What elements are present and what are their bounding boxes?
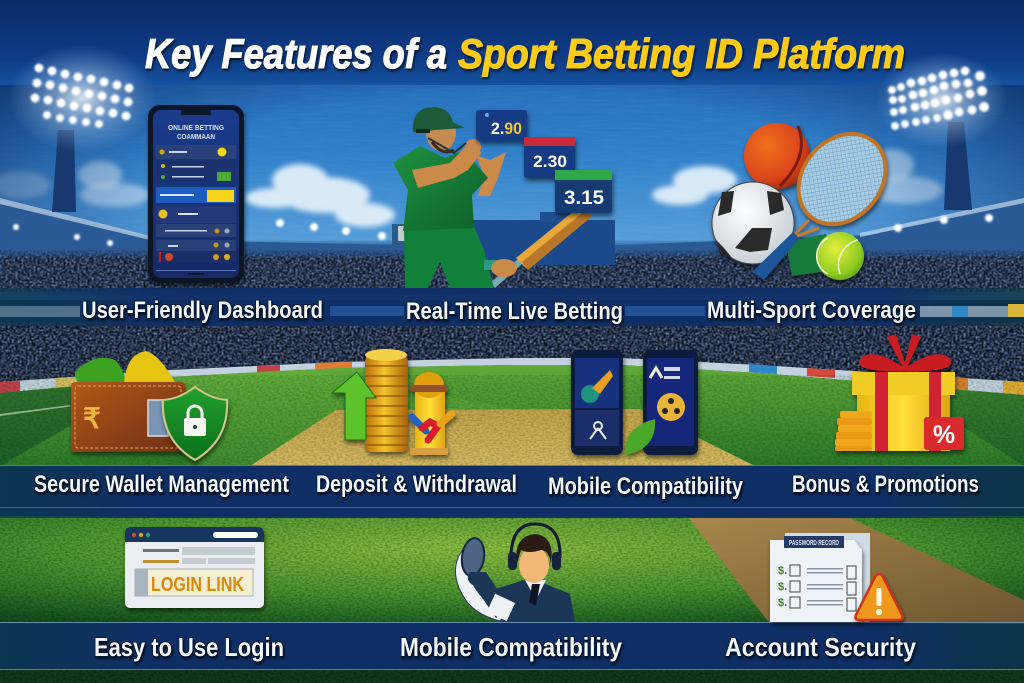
label: Real-Time Live Betting: Real-Time Live Betting (406, 298, 623, 325)
odds card 2.90: 2.90 (491, 119, 522, 138)
coin stack (835, 411, 872, 451)
warning triangle (856, 574, 902, 620)
ribbons (875, 372, 941, 451)
header band (0, 0, 1024, 85)
icon: two mobile phones (571, 350, 698, 455)
label: User-Friendly Dashboard: User-Friendly Dashboard (82, 297, 323, 324)
rupee sign: ₹ (83, 403, 101, 434)
label band row 2 (0, 465, 1024, 518)
phone left (571, 350, 623, 455)
yellow pouch (124, 351, 176, 384)
icon: gift box with coins and percent (835, 336, 964, 451)
suit (490, 578, 575, 622)
label: Mobile Compatibility (row 2): Mobile Compatibility (548, 473, 744, 500)
icon: coins with arrow and wicket (332, 349, 452, 455)
bow (860, 336, 950, 370)
phone right (643, 350, 698, 455)
lower stands with crowd and advertising boards (0, 322, 1024, 397)
background: stadium sky (0, 0, 1024, 300)
cricket ball (744, 123, 810, 189)
golden wicket (410, 372, 448, 455)
label band row 1 (0, 288, 1024, 326)
odds card 2.90 (476, 110, 527, 141)
box (857, 395, 950, 451)
document heading: PASSWORD RECORD (789, 540, 839, 547)
headset (511, 524, 560, 558)
green arrow (332, 372, 376, 440)
icon: support agent (455, 524, 575, 622)
face (426, 115, 456, 152)
shield (163, 387, 227, 460)
ear cups (508, 552, 561, 570)
shirt and tie (525, 580, 546, 606)
icon: cricketer (392, 107, 592, 288)
forearm (412, 146, 482, 188)
label: Account Security: Account Security (725, 632, 916, 662)
document rows: $. (778, 581, 787, 593)
label: Multi-Sport Coverage: Multi-Sport Coverage (707, 297, 916, 324)
trousers (404, 226, 494, 288)
document rows: $. (778, 597, 787, 609)
lower hands (484, 259, 517, 277)
icon: login window (125, 527, 264, 608)
pads pouch (392, 224, 405, 248)
helmet (413, 107, 466, 153)
icon: dashboard phone (148, 105, 244, 283)
handset (455, 537, 505, 621)
floodlight right (876, 52, 1008, 210)
login button: LOGIN LINK (151, 574, 244, 596)
title: Key Features of a (145, 30, 447, 77)
hair (516, 534, 552, 564)
document rows (778, 565, 856, 611)
floodlight left (8, 44, 156, 212)
card (148, 400, 168, 436)
label: Secure Wallet Management: Secure Wallet Management (34, 471, 289, 498)
phone heading (168, 125, 225, 141)
phone heading: COAMMAAN (177, 134, 215, 141)
document rows: $. (778, 565, 787, 577)
bottom grass strip (0, 668, 1024, 683)
field lower with dirt path (0, 516, 1024, 624)
icon: documents with warning (770, 533, 902, 622)
hand near card (465, 139, 481, 155)
odds card 2.30 (524, 137, 575, 178)
odds card 2.30: 2.30 (533, 152, 567, 171)
percent tile: % (933, 421, 955, 449)
label band row 3 (0, 622, 1024, 670)
label: Mobile Compatibility (row 3): Mobile Compatibility (400, 632, 622, 662)
title (145, 30, 905, 77)
phone rows (156, 145, 236, 275)
phone heading: ONLINE BETTING (168, 125, 225, 132)
label: Bonus & Promotions: Bonus & Promotions (792, 471, 979, 498)
odds card 3.15 (555, 170, 612, 213)
colour check (412, 414, 452, 440)
shirt (393, 146, 488, 231)
wristband (786, 234, 836, 276)
wallet body (71, 382, 185, 452)
face (519, 547, 549, 583)
label: Deposit & Withdrawal: Deposit & Withdrawal (316, 471, 517, 498)
leaf (625, 419, 655, 455)
arm and hand (468, 572, 515, 621)
title: Sport Betting ID Platform (458, 30, 905, 77)
racket (752, 116, 903, 280)
cricket bat (490, 206, 592, 288)
panel block behind batter (470, 212, 615, 265)
field upper with pitch (0, 365, 1024, 466)
label: Easy to Use Login: Easy to Use Login (94, 632, 284, 662)
tennis ball (816, 232, 864, 280)
icon: sports balls and racket (712, 116, 903, 280)
football (712, 182, 794, 264)
icon: wallet with shield (71, 351, 227, 460)
arm raised back (476, 152, 506, 196)
odds card 3.15: 3.15 (564, 188, 604, 209)
stadium stands with upper crowd (0, 198, 1024, 295)
leaf (75, 358, 126, 384)
coin stack (365, 349, 408, 452)
